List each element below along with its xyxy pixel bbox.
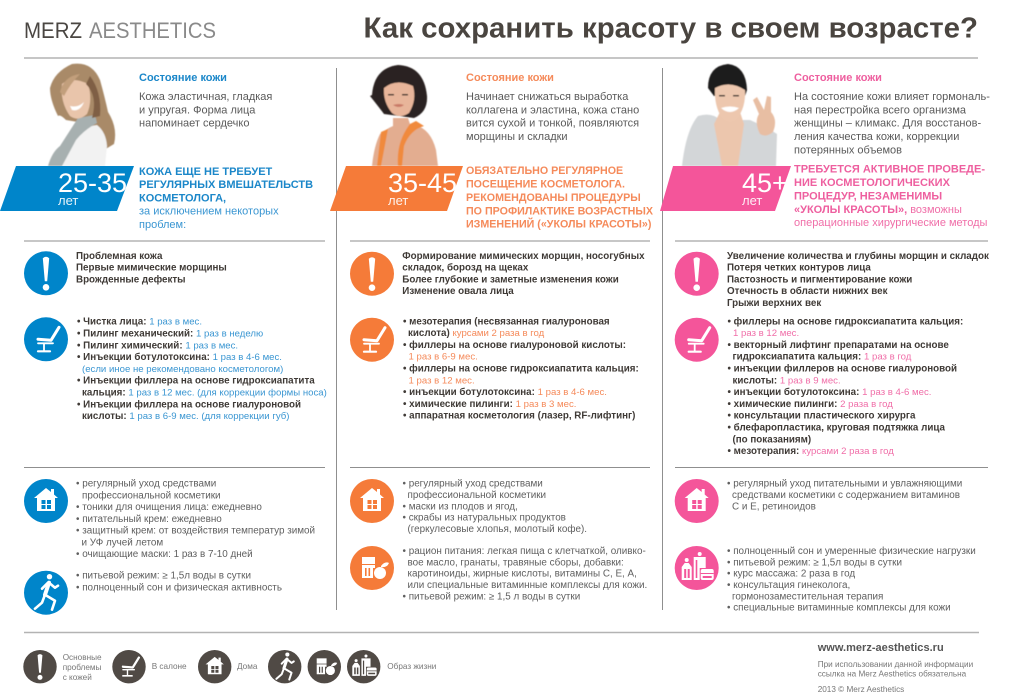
legend item: main skin problems: проблемы <box>63 663 102 672</box>
legend item: main skin problems: с кожей <box>63 673 92 682</box>
salon procedures: • аппаратная косметология (лазер, RF-лифтинг) <box>403 411 635 422</box>
home care: и УФ лучей летом <box>82 537 163 548</box>
problems list <box>727 251 989 309</box>
recommendation <box>794 164 988 229</box>
icon: problems <box>675 252 719 296</box>
recommendation: ОБЯЗАТЕЛЬНО РЕГУЛЯРНОЕ <box>466 165 623 177</box>
salon procedures: • мезотерапия (несвязанная гиалуроновая <box>403 316 610 327</box>
legend item: in salon: В салоне <box>152 662 187 671</box>
photo: smiling woman with raised hand <box>682 64 777 166</box>
recommendation: ПРОЦЕДУР, НЕЗАМЕНИМЫ <box>794 190 942 202</box>
skin condition: ления качества кожи, коррекции <box>794 131 959 143</box>
icon: home <box>350 479 394 523</box>
icon: home <box>675 479 719 523</box>
legend item: at home: Дома <box>237 662 258 671</box>
recommendation: КОЖА ЕЩЕ НЕ ТРЕБУЕТ <box>139 166 273 178</box>
home care: средствами косметики с содержанием витаминов <box>732 490 960 501</box>
footer: website and copyright: 2013 © Merz Aesthetics <box>818 685 904 694</box>
home care: • регулярный уход питательными и увлажняющими <box>727 479 962 490</box>
problems list: Первые мимические морщины <box>76 263 227 274</box>
salon procedures: 1 раз в 12 мес. <box>733 328 799 339</box>
legend item: lifestyle: Образ жизни <box>387 662 436 671</box>
age banner: 25-35 <box>58 168 127 198</box>
lifestyle: вое масло, гранаты, травяные сборы, добавки: <box>408 557 624 568</box>
salon procedures: • консультации пластического хирурга <box>728 411 916 422</box>
salon procedures: кислоты: 1 раз в 9 мес. <box>732 375 841 386</box>
recommendation: НИЕ КОСМЕТОЛОГИЧЕСКИХ <box>794 177 951 189</box>
salon procedures: • Пилинг механический: 1 раз в неделю <box>77 328 263 340</box>
salon procedures: кислоты: 1 раз в 6-9 мес. (для коррекции губ) <box>82 411 289 422</box>
lifestyle: • консультация гинеколога, <box>727 580 850 591</box>
title: Как сохранить красоту в своем возрасте? <box>364 12 978 44</box>
recommendation: ТРЕБУЕТСЯ АКТИВНОЕ ПРОВЕДЕ- <box>794 164 985 176</box>
salon procedures <box>728 316 963 457</box>
icon: runner <box>24 571 68 615</box>
logo: Merz Aesthetics: AESTHETICS <box>89 18 216 43</box>
photo: dark-haired woman <box>370 65 438 166</box>
problems list: Более глубокие и заметные изменения кожи <box>402 274 619 286</box>
legend item: at home <box>198 650 258 683</box>
skin condition: ная перестройка всего организма <box>794 104 967 116</box>
icon: salon chair <box>675 318 719 362</box>
age banner: лет <box>388 193 408 208</box>
footer: website and copyright: www.merz-aesthetics.ru <box>817 642 944 654</box>
salon procedures: • филлеры на основе гиалуроновой кислоты: <box>403 340 626 351</box>
skin condition: морщины и складки <box>466 131 568 143</box>
lifestyle: • рацион питания: легкая пища с клетчаткой, оливко- <box>402 546 646 557</box>
recommendation: проблем: <box>139 219 186 231</box>
icon: cosmetic bottles <box>675 546 719 590</box>
lifestyle: • питьевой режим: ≥ 1,5 л воды в сутки <box>402 591 580 602</box>
skin condition <box>794 72 990 156</box>
recommendation: операционные хирургические методы <box>794 217 988 229</box>
home care: профессиональной косметики <box>82 490 221 501</box>
problems list <box>76 251 227 285</box>
skin condition: напоминает сердечко <box>139 118 249 130</box>
skin condition: потерянных объемов <box>794 144 902 156</box>
lifestyle: • питьевой режим: ≥ 1,5л воды в сутки <box>727 557 902 568</box>
recommendation: РЕГУЛЯРНЫХ ВМЕШАТЕЛЬСТВ <box>139 179 313 191</box>
footer: website and copyright: При использовании данной информации <box>818 660 973 669</box>
panel: age 35-45 <box>330 65 654 602</box>
salon procedures: • векторный лифтинг препаратами на основе <box>728 340 949 351</box>
icon: problems <box>350 252 394 296</box>
legend item: main skin problems <box>23 650 102 683</box>
lifestyle: или специальные витаминные комплексы для кожи. <box>408 580 647 591</box>
problems list: Грыжи верхних век <box>727 298 821 309</box>
home care: С и Е, ретиноидов <box>732 501 816 512</box>
problems list: Увеличение количества и глубины морщин и складок <box>727 251 989 262</box>
home care: (геркулесовые хлопья, молотый кофе). <box>408 524 587 535</box>
salon procedures: • блефаропластика, круговая подтяжка лица <box>728 422 945 434</box>
salon procedures: • Пилинг химический: 1 раз в мес. <box>77 340 238 351</box>
home care <box>76 479 315 560</box>
problems list: Потеря четких контуров лица <box>727 263 871 274</box>
home care: • очищающие маски: 1 раз в 7-10 дней <box>76 549 253 560</box>
recommendation: ПО ПРОФИЛАКТИКЕ ВОЗРАСТНЫХ <box>466 205 654 217</box>
home care: • питательный крем: ежедневно <box>76 514 222 525</box>
recommendation: «УКОЛЫ КРАСОТЫ», возможны <box>794 204 962 216</box>
salon procedures: 1 раз в 6-9 мес. <box>408 352 478 363</box>
problems list: Проблемная кожа <box>76 251 163 262</box>
home care <box>727 479 962 512</box>
home care: • защитный крем: от воздействия температур зимой <box>76 526 315 537</box>
skin condition: коллагена и эластина, кожа стано <box>466 104 639 116</box>
home care <box>402 479 587 535</box>
age banner: лет <box>742 193 762 208</box>
salon procedures: • Чистка лица: 1 раз в мес. <box>77 317 202 328</box>
home care: • скрабы из натуральных продуктов <box>402 513 566 524</box>
skin condition: Начинает снижаться выработка <box>466 91 629 103</box>
salon procedures: • филлеры на основе гидроксиапатита кальция: <box>403 364 639 374</box>
salon procedures: • Инъекции филлера на основе гиалуроновой <box>77 399 301 410</box>
salon procedures: • инъекции ботулотоксина: 1 раз в 4-6 мес. <box>728 387 931 398</box>
skin condition: женщины – климакс. Для восстанов- <box>794 118 981 130</box>
legend item: main skin problems: Основные <box>63 653 102 662</box>
recommendation <box>466 165 654 231</box>
legend item: lifestyle <box>268 650 436 683</box>
problems list: Пастозность и пигментирование кожи <box>727 274 912 286</box>
salon procedures: гидроксиапатита кальция: 1 раз в год <box>732 352 912 363</box>
salon procedures: • Инъекции филлера на основе гидроксиапатита <box>77 376 315 387</box>
salon procedures: кальция: 1 раз в 12 мес. (для коррекции формы носа) <box>82 388 327 398</box>
panel: age 45+ <box>660 64 990 614</box>
panel: age 25-35 <box>0 64 327 615</box>
problems list: Формирование мимических морщин, носогубных <box>402 251 645 262</box>
problems list <box>402 251 645 297</box>
lifestyle <box>727 546 976 614</box>
lifestyle: • курс массажа: 2 раза в год <box>727 569 855 580</box>
salon procedures: • химические пилинги: 2 раза в год <box>728 399 893 410</box>
home care: • регулярный уход средствами <box>402 479 543 490</box>
salon procedures: 1 раз в 12 мес. <box>408 375 475 386</box>
skin condition: и упругая. Форма лица <box>139 104 256 116</box>
skin condition: На состояние кожи влияет гормональ- <box>794 91 990 103</box>
recommendation: РЕКОМЕНДОВАНЫ ПРОЦЕДУРЫ <box>466 192 641 204</box>
age banner: лет <box>58 193 78 208</box>
icon: salon chair <box>24 317 68 361</box>
age banner <box>330 166 463 211</box>
lifestyle: гормонозаместительная терапия <box>732 591 883 602</box>
skin condition <box>139 72 272 130</box>
salon procedures <box>403 316 639 422</box>
problems list: Отечность в области нижних век <box>727 286 888 297</box>
skin condition: Состояние кожи <box>794 72 882 84</box>
home care: • маски из плодов и ягод, <box>402 501 518 512</box>
lifestyle <box>402 546 647 602</box>
problems list: Изменение овала лица <box>402 286 514 297</box>
icon: problems <box>24 251 68 295</box>
salon procedures: • филлеры на основе гидроксиапатита кальция: <box>728 316 963 327</box>
home care: профессиональной косметики <box>408 490 546 501</box>
problems list: складок, борозд на щеках <box>402 263 529 274</box>
home care: • регулярный уход средствами <box>76 479 216 490</box>
recommendation: КОСМЕТОЛОГА, <box>139 192 226 204</box>
age banner: 45+ <box>742 168 788 198</box>
legend <box>23 650 436 683</box>
lifestyle: • полноценный сон и умеренные физические нагрузки <box>727 546 976 557</box>
skin condition: Кожа эластичная, гладкая <box>139 91 272 103</box>
salon procedures: • Инъекции ботулотоксина: 1 раз в 4-6 мес. <box>77 352 282 363</box>
lifestyle <box>76 571 282 593</box>
salon procedures <box>77 317 327 422</box>
recommendation: ИЗМЕНЕНИЙ («УКОЛЫ КРАСОТЫ») <box>466 218 652 231</box>
footer: website and copyright: ссылка на Merz Aesthetics обязательна <box>818 670 967 679</box>
skin condition: Состояние кожи <box>466 72 554 84</box>
lifestyle: каротиноиды, жирные кислоты, витамины С, Е, А, <box>408 569 637 580</box>
salon procedures: • инъекции ботулотоксина: 1 раз в 4-6 мес. <box>403 387 607 398</box>
salon procedures: • инъекции филлеров на основе гиалуроновой <box>728 364 957 374</box>
icon: home <box>24 479 68 523</box>
age banner <box>0 166 134 211</box>
salon procedures: • химические пилинги: 1 раз в 3 мес. <box>403 399 576 410</box>
logo: Merz Aesthetics: MERZ <box>24 18 82 43</box>
icon: food <box>350 546 394 590</box>
home care: • тоники для очищения лица: ежедневно <box>76 502 262 513</box>
photo: blonde woman <box>48 64 115 166</box>
salon procedures: • мезотерапия: курсами 2 раза в год <box>728 446 894 457</box>
lifestyle: • питьевой режим: ≥ 1,5л воды в сутки <box>76 571 251 582</box>
recommendation: ПОСЕЩЕНИЕ КОСМЕТОЛОГА. <box>466 178 625 190</box>
recommendation <box>139 166 313 231</box>
problems list: Врожденные дефекты <box>76 274 186 285</box>
lifestyle: • полноценный сон и физическая активность <box>76 582 282 593</box>
icon: salon chair <box>350 318 394 362</box>
skin condition: вится сухой и тонкой, появляются <box>466 118 639 130</box>
logo: Merz Aesthetics <box>24 18 216 43</box>
legend item: in salon <box>112 650 187 683</box>
age banner: 35-45 <box>388 168 457 198</box>
lifestyle: • специальные витаминные комплексы для кожи <box>727 603 951 614</box>
salon procedures: (если иное не рекомендовано косметологом) <box>82 364 283 375</box>
salon procedures: (по показаниям) <box>732 434 811 445</box>
salon procedures: кислота) курсами 2 раза в год <box>408 328 545 339</box>
skin condition <box>466 72 639 143</box>
age banner <box>660 166 791 211</box>
footer: website and copyright <box>817 642 973 694</box>
skin condition: Состояние кожи <box>139 72 227 84</box>
recommendation: за исключением некоторых <box>139 206 279 218</box>
